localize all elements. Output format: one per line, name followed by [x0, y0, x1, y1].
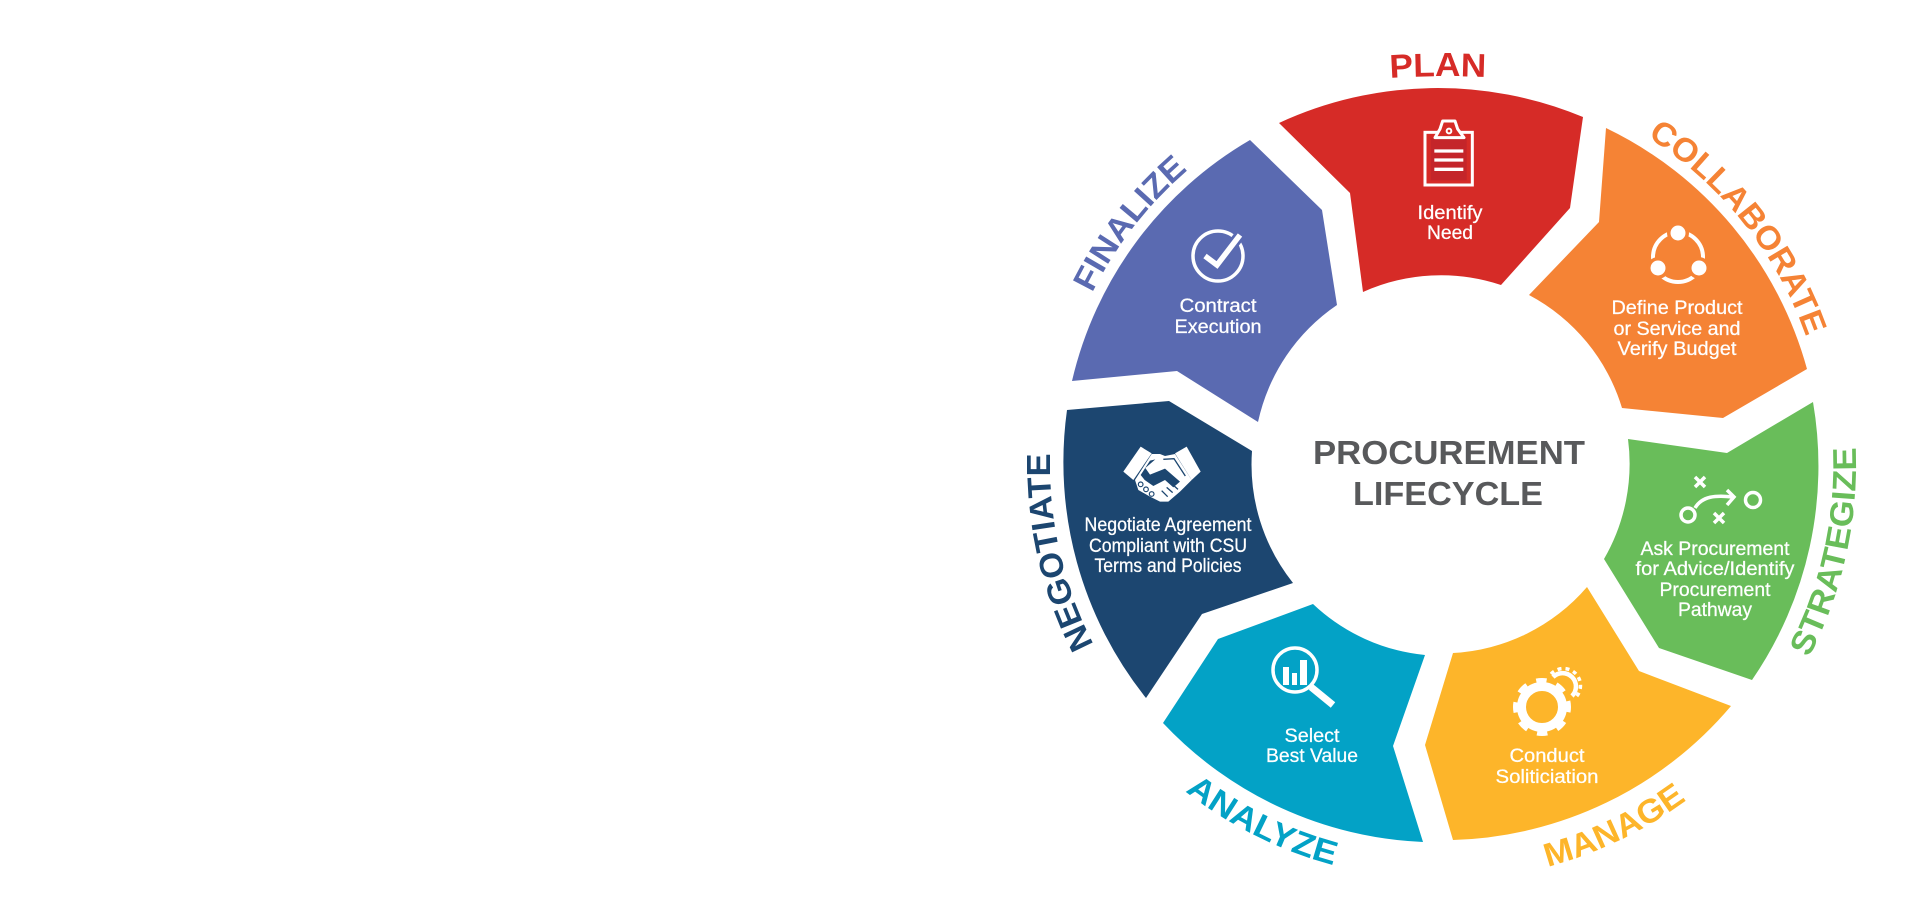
manage label: MANAGE: [1543, 782, 1686, 866]
center title: [1313, 434, 1585, 512]
negotiate text: Terms and Policies: [1094, 556, 1242, 577]
manage segment: [1425, 587, 1731, 840]
strategize text: for Advice/Identify: [1636, 559, 1795, 580]
panel: negotiate: [1027, 401, 1293, 698]
icon: play diagram: [1681, 477, 1760, 523]
icon: magnifier with bars: [1273, 648, 1333, 705]
analyze segment: [1163, 604, 1425, 842]
plan segment: [1279, 88, 1583, 292]
icon: gears: [1516, 669, 1580, 734]
panel: analyze: [1163, 604, 1425, 865]
strategize text: Ask Procurement: [1640, 539, 1790, 560]
center title: PROCUREMENT: [1313, 434, 1585, 471]
analyze text: Best Value: [1266, 746, 1358, 767]
plan label: PLAN: [1391, 53, 1484, 78]
icon: three linked nodes: [1647, 222, 1710, 282]
manage text: [1496, 746, 1598, 788]
strategize text: [1636, 539, 1795, 621]
manage text: Soliticiation: [1496, 767, 1598, 788]
collaborate text: [1612, 298, 1743, 360]
icon: clipboard: [1425, 121, 1472, 185]
collaborate segment: [1529, 128, 1807, 418]
strategize segment: [1604, 402, 1818, 680]
strategize text: Pathway: [1678, 600, 1753, 621]
collaborate text: Verify Budget: [1618, 339, 1737, 360]
finalize segment: [1072, 140, 1337, 422]
plan text: [1418, 203, 1483, 244]
manage text: Conduct: [1510, 746, 1585, 767]
negotiate segment: [1063, 401, 1293, 698]
finalize text: Contract: [1180, 296, 1257, 317]
analyze label: ANALYZE: [1186, 779, 1338, 865]
center title: LIFECYCLE: [1353, 475, 1543, 512]
strategize label: STRATEGIZE: [1792, 448, 1856, 654]
collaborate text: Define Product: [1612, 298, 1743, 319]
collaborate text: or Service and: [1614, 319, 1740, 340]
finalize label: FINALIZE: [1073, 154, 1187, 291]
panel: collaborate: [1529, 122, 1827, 418]
panel: manage: [1425, 587, 1731, 866]
panel: strategize: [1604, 402, 1856, 680]
negotiate label: NEGOTIATE: [1027, 454, 1093, 652]
finalize text: Execution: [1174, 317, 1262, 338]
strategize text: Procurement: [1660, 580, 1771, 601]
panel: plan: [1279, 53, 1583, 292]
icon: check circle: [1193, 231, 1243, 281]
negotiate text: [1084, 515, 1252, 577]
plan text: Need: [1427, 223, 1473, 244]
negotiate text: Compliant with CSU: [1089, 536, 1247, 557]
analyze text: Select: [1284, 726, 1340, 747]
icon: handshake: [1123, 447, 1201, 502]
negotiate text: Negotiate Agreement: [1084, 515, 1252, 536]
analyze text: [1266, 726, 1358, 767]
plan text: Identify: [1418, 203, 1483, 224]
finalize text: [1174, 296, 1262, 338]
collaborate label: COLLABORATE: [1652, 122, 1827, 336]
panel: finalize: [1072, 140, 1337, 422]
